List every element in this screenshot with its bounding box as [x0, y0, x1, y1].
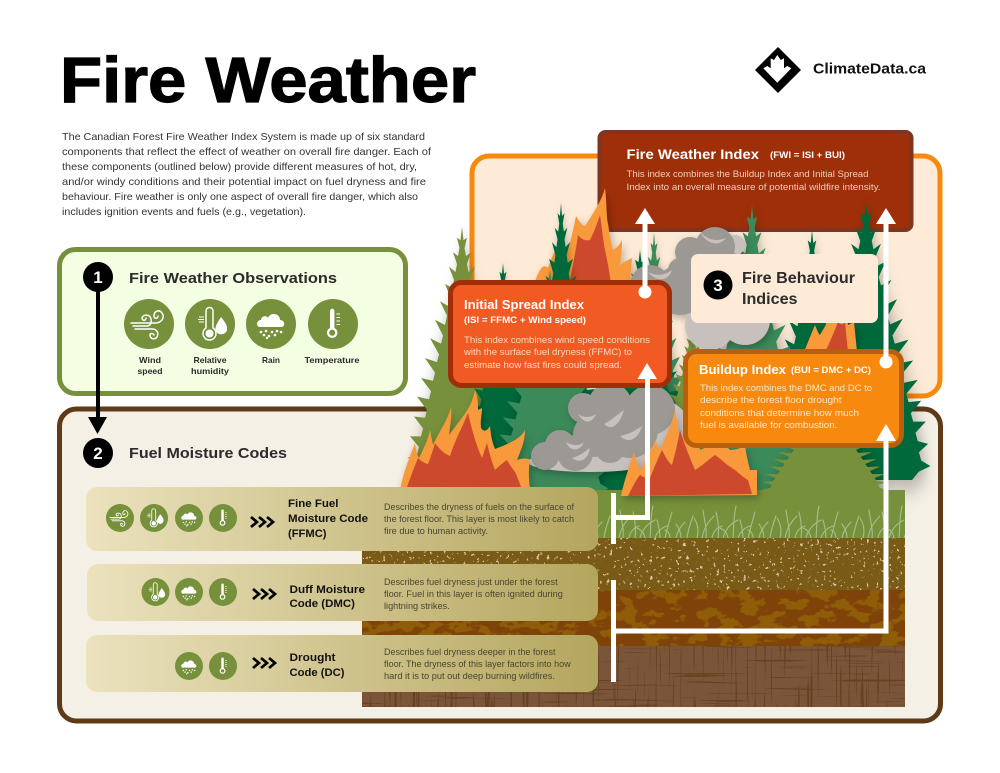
number 1 with arrow to number 2: 1 — [93, 268, 103, 287]
layer: deep soil — [362, 646, 905, 707]
row: duff moisture code: Code (DMC) — [290, 598, 355, 610]
box: initial spread index: estimate how fast fires could spread. — [464, 360, 622, 371]
panel: fire weather observations — [60, 250, 406, 394]
box: fire weather index: Fire Weather Index — [626, 147, 760, 162]
row: fine fuel moisture code: the forest floor. This layer is most likely to catch — [384, 514, 574, 524]
box: fire weather index: (FWI = ISI + BUI) — [770, 150, 845, 160]
arrow: initial spread index to fire weather index — [635, 208, 655, 298]
icon: rain — [246, 299, 296, 349]
icon labels: Temperature — [304, 355, 360, 365]
row: duff moisture code — [87, 564, 598, 621]
flames: upper — [532, 188, 632, 290]
box: buildup index: fuel is available for combustion. — [700, 420, 838, 431]
row: drought code: Describes fuel dryness deeper in the forest — [384, 647, 556, 657]
box: initial spread index — [450, 282, 670, 386]
icon labels: Rain — [262, 355, 280, 365]
row: fine fuel moisture code — [86, 487, 598, 551]
heading: fuel moisture codes — [83, 438, 287, 468]
box: fire behaviour indices — [691, 254, 878, 323]
icon: relative humidity — [185, 299, 235, 349]
logo: ClimateData.ca: ClimateData.ca — [813, 60, 927, 78]
intro paragraph: The Canadian Forest Fire Weather Index System is made up of six standard — [62, 131, 425, 143]
box: fire behaviour indices: Indices — [742, 291, 798, 308]
box: initial spread index: Initial Spread Index — [464, 297, 585, 312]
heading: fuel moisture codes: 2 — [93, 444, 103, 463]
forest: trees — [406, 202, 930, 500]
box: buildup index: This index combines the DMC and DC to — [700, 383, 872, 394]
number 3 — [704, 270, 732, 300]
row: fine fuel moisture code: fire due to human activity. — [384, 526, 488, 536]
intro paragraph: includes ignition events and fuels (e.g., vegetation). — [62, 206, 306, 218]
layer: duff — [362, 590, 905, 646]
row: drought code: Code (DC) — [290, 667, 345, 679]
icon labels: Relative — [194, 355, 227, 365]
intro paragraph — [62, 131, 431, 218]
title: Fire Weather — [60, 44, 476, 116]
row: fine fuel moisture code: Moisture Code — [288, 513, 368, 525]
number 3: 3 — [713, 276, 723, 295]
arrow: buildup index to fire weather index — [876, 208, 896, 368]
box: fire weather index — [600, 132, 912, 230]
heading: fuel moisture codes: Fuel Moisture Codes — [129, 445, 287, 462]
box: buildup index — [686, 352, 902, 446]
box: buildup index: describe the forest floor drought — [700, 395, 842, 406]
box: buildup index: Buildup Index — [699, 363, 786, 377]
row: duff moisture code: Describes fuel dryness just under the forest — [384, 577, 558, 587]
icon labels — [138, 355, 360, 376]
logo: ClimateData.ca — [755, 47, 927, 93]
icon: temperature — [308, 299, 358, 349]
flames: small right — [804, 298, 857, 352]
icon labels: Wind — [139, 355, 161, 365]
icon labels: speed — [138, 366, 162, 376]
row: duff moisture code: lightning strikes. — [384, 601, 450, 611]
row: drought code: Drought — [290, 652, 336, 664]
intro paragraph: components that reflect the effect of weather on overall fire danger. Each of — [62, 146, 431, 158]
panel: fuel moisture codes background — [60, 409, 940, 721]
icon labels: humidity — [191, 366, 229, 376]
row: drought code: floor. The dryness of this layer factors into how — [384, 659, 571, 669]
row: drought code — [86, 635, 598, 692]
row: fine fuel moisture code: Fine Fuel — [288, 498, 338, 510]
box: initial spread index: This index combines wind speed conditions — [464, 335, 650, 346]
box: initial spread index: (ISI = FFMC + Wind speed) — [464, 315, 586, 326]
box: fire weather index: This index combines the Buildup Index and Initial Spread — [626, 169, 868, 180]
arrow: FFMC to initial spread index — [614, 363, 657, 544]
box: fire weather index: Index into an overall measure of potential wildfire intensity. — [626, 182, 880, 193]
layer: grass — [362, 490, 905, 538]
heading: fire weather observations: Fire Weather Observations — [129, 270, 337, 287]
ground layers — [362, 490, 905, 707]
smoke: upper — [630, 227, 770, 350]
row: fine fuel moisture code: (FFMC) — [288, 528, 327, 540]
icon: wind speed — [124, 299, 174, 349]
intro paragraph: behaviour. Fire weather is only one aspect of overall fire danger, which also — [62, 191, 418, 203]
row: duff moisture code: Duff Moisture — [290, 584, 365, 596]
intro paragraph: these components (outlined below) provide different measures of hot, dry, — [62, 161, 417, 173]
panel: fire behaviour background — [472, 156, 940, 396]
number 1 with arrow to number 2 — [83, 262, 113, 434]
box: initial spread index: with the surface fuel dryness (FFMC) to — [463, 347, 632, 358]
row: drought code: hard it is to put out deep burning wildfires. — [384, 671, 555, 681]
smoke: lower — [528, 383, 690, 472]
box: buildup index: conditions that determine how much — [700, 408, 859, 419]
flames: lower centre — [621, 410, 757, 496]
flames: lower left — [400, 390, 530, 490]
box: fire behaviour indices: Fire Behaviour — [742, 270, 855, 287]
row: duff moisture code: floor. Fuel in this layer is often ignited during — [384, 589, 563, 599]
box: buildup index: (BUI = DMC + DC) — [791, 365, 871, 375]
row: fine fuel moisture code: Describes the dryness of fuels on the surface of — [384, 502, 575, 512]
arrow: DMC and DC to buildup index — [614, 424, 896, 682]
intro paragraph: and/or windy conditions and their potential impact on fuel dryness and fire — [62, 176, 426, 188]
layer: surface soil — [362, 538, 905, 590]
